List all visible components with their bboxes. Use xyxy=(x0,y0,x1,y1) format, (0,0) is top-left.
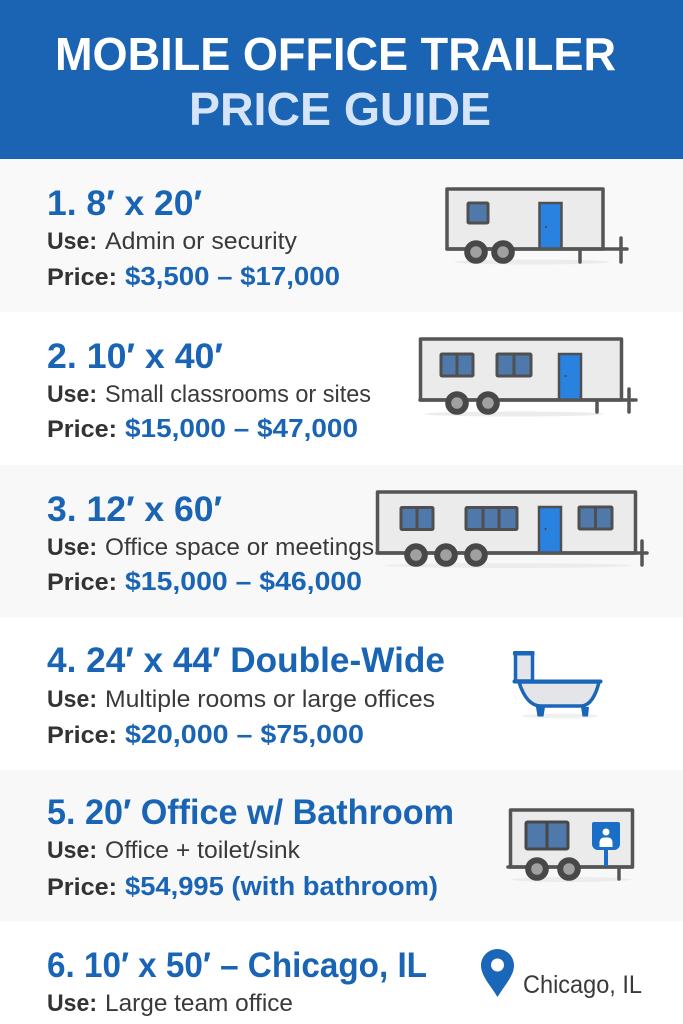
price line: Price: xyxy=(47,264,117,291)
location label: Chicago, IL xyxy=(523,971,642,999)
icon: trailer with bathroom sign xyxy=(508,810,632,882)
panel: office with bathroom xyxy=(0,770,683,921)
price line xyxy=(47,415,358,443)
heading: Chicago: 6. 10′ x 50′ – Chicago, IL xyxy=(47,946,427,985)
title: PRICE GUIDE xyxy=(189,83,491,135)
panel: 12 x 60 trailer xyxy=(0,465,683,617)
heading: 8 x 20: 1. 8′ x 20′ xyxy=(47,184,202,223)
price line: $3,500 – $17,000 xyxy=(125,263,340,291)
price line xyxy=(47,721,364,749)
price line: $20,000 – $75,000 xyxy=(125,721,364,749)
icon: bathtub xyxy=(513,651,600,718)
use line: Multiple rooms or large offices xyxy=(105,686,435,713)
header banner xyxy=(0,0,683,159)
price line: $54,995 (with bathroom) xyxy=(125,873,438,901)
icon: small trailer xyxy=(447,189,627,264)
use line: Use: xyxy=(47,534,97,561)
price line: Price: xyxy=(47,722,117,749)
price line: $15,000 – $47,000 xyxy=(125,415,358,443)
panel: 10 x 40 trailer xyxy=(0,312,683,465)
panel: double-wide xyxy=(0,617,683,770)
use line: Use: xyxy=(47,686,97,713)
use line: Large team office xyxy=(105,990,293,1017)
heading: 12 x 60: 3. 12′ x 60′ xyxy=(47,490,222,529)
title xyxy=(55,28,616,135)
price line: Price: xyxy=(47,569,117,596)
use line: Use: xyxy=(47,990,97,1017)
use line: Office + toilet/sink xyxy=(105,837,301,864)
price line xyxy=(47,263,340,291)
panel: Chicago trailer xyxy=(0,921,683,1024)
icon: long trailer xyxy=(377,492,647,568)
use line: Office space or meetings xyxy=(105,534,374,561)
icon: map pin xyxy=(481,949,514,997)
use line: Small classrooms or sites xyxy=(105,381,371,408)
price line: $15,000 – $46,000 xyxy=(125,568,362,596)
heading: office with bathroom: 5. 20′ Office w/ Bathroom xyxy=(47,793,454,832)
heading: 10 x 40: 2. 10′ x 40′ xyxy=(47,337,223,376)
price line: Price: xyxy=(47,874,117,901)
price line: Price: xyxy=(47,416,117,443)
use line: Use: xyxy=(47,228,97,255)
price line xyxy=(47,568,362,596)
heading: double-wide: 4. 24′ x 44′ Double-Wide xyxy=(47,641,445,680)
use line: Use: xyxy=(47,381,97,408)
use line: Admin or security xyxy=(105,228,298,255)
panel: 8 x 20 trailer xyxy=(0,159,683,312)
icon: medium trailer xyxy=(420,339,636,416)
title: MOBILE OFFICE TRAILER xyxy=(55,28,616,80)
use line: Use: xyxy=(47,837,97,864)
